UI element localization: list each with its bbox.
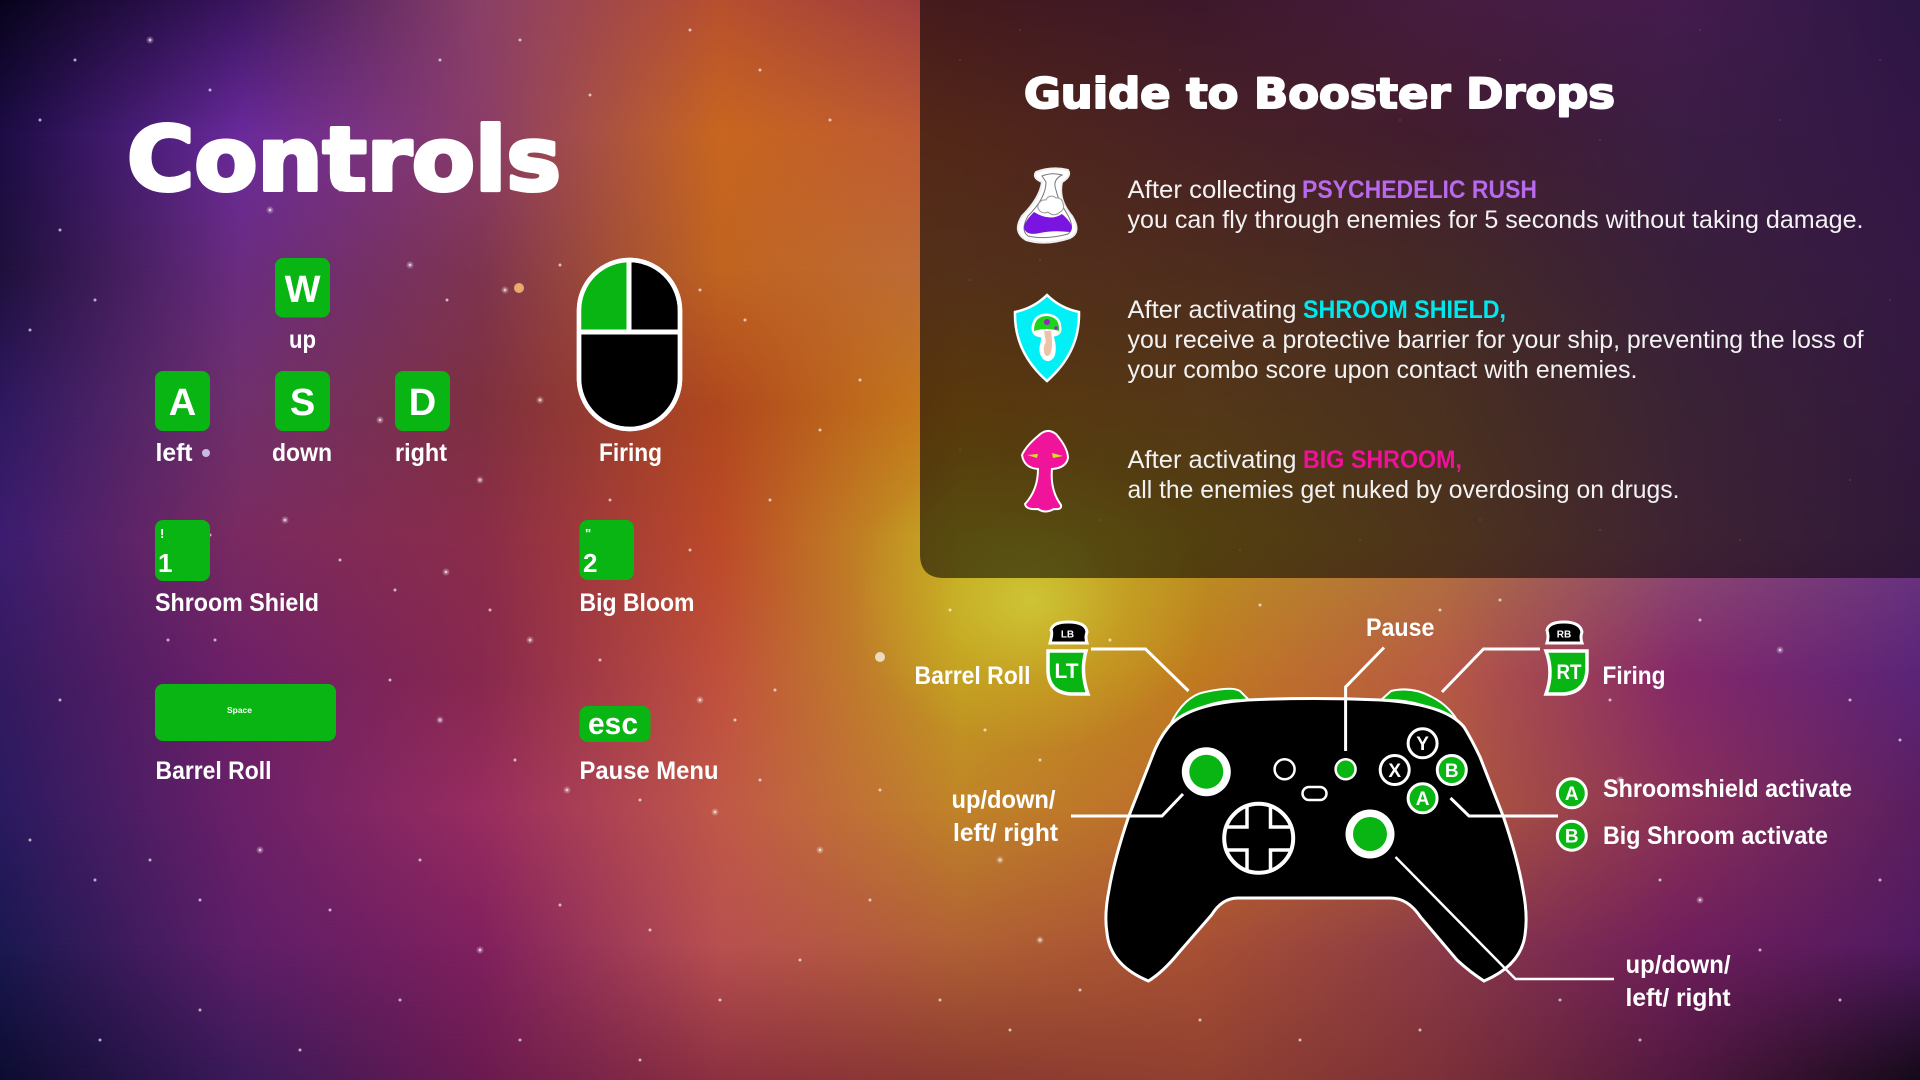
text: big shroom description: all the enemies get nuked by overdosing on drugs. xyxy=(1128,476,1680,504)
gamepad: body xyxy=(1106,698,1526,981)
key: 1 xyxy=(155,520,210,581)
label: Firing: Firing xyxy=(599,439,662,467)
text: shroom shield description line 2: your combo score upon contact with enemies. xyxy=(1128,356,1638,384)
panel: booster drops background xyxy=(920,0,1920,578)
text: shroom shield xyxy=(1128,296,1506,324)
text: psychedelic rush: After collecting xyxy=(1128,176,1296,204)
label: left stick directions: up/down/ xyxy=(952,786,1056,814)
legend: B Big Shroom activate: B xyxy=(1565,826,1579,848)
gamepad: X button: X xyxy=(1388,761,1401,782)
icon: RB: RB xyxy=(1557,630,1571,640)
label: Pause Menu: Pause Menu xyxy=(580,757,718,785)
label: right: right xyxy=(395,439,448,467)
label: Barrel Roll: Barrel Roll xyxy=(156,757,272,785)
gamepad: A button: A xyxy=(1416,789,1430,810)
label: Firing trigger: Firing xyxy=(1602,662,1666,690)
key: 2: 2 xyxy=(583,548,597,578)
key: A: A xyxy=(169,382,196,424)
icon: RB xyxy=(1547,622,1582,643)
label: right stick directions: up/down/ xyxy=(1626,951,1731,979)
icon: psychedelic rush flask xyxy=(1018,168,1077,243)
text: big shroom xyxy=(1128,446,1462,474)
gamepad: X button xyxy=(1380,756,1409,784)
key: 1: 1 xyxy=(158,548,172,578)
label: up: up xyxy=(289,326,316,354)
label: right stick directions: left/ right xyxy=(1626,984,1731,1012)
text: shroom shield: SHROOM SHIELD, xyxy=(1303,296,1506,324)
key: 2 xyxy=(580,520,634,580)
key: 1: ! xyxy=(160,526,164,541)
gamepad: left stick xyxy=(1182,747,1231,796)
key: esc: esc xyxy=(588,706,638,741)
label: Barrel Roll bumper: Barrel Roll xyxy=(914,662,1030,690)
text: big shroom: BIG SHROOM, xyxy=(1303,446,1462,474)
icon: LT: LT xyxy=(1054,660,1079,683)
gamepad: share button xyxy=(1302,787,1326,800)
legend: B Big Shroom activate: Big Shroom activate xyxy=(1603,822,1828,850)
gamepad: Y button: Y xyxy=(1416,734,1429,755)
key: Space xyxy=(155,684,336,741)
gamepad: left bumper highlight xyxy=(1170,689,1249,725)
key: D xyxy=(395,371,450,431)
diagram: gamepad xyxy=(1106,689,1526,981)
gamepad: Y button xyxy=(1408,729,1437,758)
icon: LB: LB xyxy=(1061,630,1074,640)
label: right stick directions xyxy=(1626,951,1731,1012)
label: left stick directions: left/ right xyxy=(953,819,1059,847)
icon: LB xyxy=(1050,622,1087,643)
text: big shroom: After activating xyxy=(1128,446,1296,474)
icon: mouse xyxy=(579,260,680,429)
key: D: D xyxy=(409,382,436,424)
gamepad: B button xyxy=(1437,756,1466,784)
key: W: W xyxy=(285,269,321,311)
label: Pause: Pause xyxy=(1366,614,1435,642)
legend: A Shroomshield activate xyxy=(1557,775,1852,808)
label: left stick directions xyxy=(952,786,1059,847)
gamepad: right bumper highlight xyxy=(1381,689,1460,725)
gamepad: right stick xyxy=(1346,810,1394,858)
key: Space: Space xyxy=(227,705,252,715)
key: A xyxy=(155,371,210,431)
icon: RT xyxy=(1546,651,1587,694)
gamepad: B button: B xyxy=(1445,761,1459,782)
legend: A Shroomshield activate: Shroomshield activate xyxy=(1603,775,1852,803)
key: S xyxy=(275,371,330,431)
icon: big shroom xyxy=(1022,431,1068,512)
text: psychedelic rush xyxy=(1128,176,1537,204)
gamepad: view button xyxy=(1275,759,1295,779)
key: W xyxy=(275,258,330,318)
text: psychedelic rush: PSYCHEDELIC RUSH xyxy=(1302,176,1537,204)
icon: LT xyxy=(1048,651,1088,694)
gamepad: A button xyxy=(1408,784,1437,813)
text: psychedelic rush description: you can fly through enemies for 5 seconds without taking damage. xyxy=(1128,206,1864,234)
text: shroom shield: After activating xyxy=(1128,296,1296,324)
label: left: left xyxy=(156,439,193,467)
key: 2: " xyxy=(585,526,591,541)
title: Controls: Controls xyxy=(127,108,561,211)
icon: shroom shield xyxy=(1015,295,1079,381)
gamepad: menu button xyxy=(1336,759,1356,779)
heading: Guide to Booster Drops: Guide to Booster Drops xyxy=(1024,69,1615,118)
leader lines xyxy=(1071,648,1614,979)
icon: RT: RT xyxy=(1556,661,1582,684)
key: S: S xyxy=(290,382,315,424)
label: Shroom Shield: Shroom Shield xyxy=(155,589,319,617)
label: down: down xyxy=(272,439,332,467)
gamepad: d-pad xyxy=(1224,804,1293,873)
legend: A Shroomshield activate: A xyxy=(1565,784,1579,805)
label: Big Bloom: Big Bloom xyxy=(580,589,694,617)
text: shroom shield description line 1: you receive a protective barrier for your ship, preventing the loss of xyxy=(1128,326,1864,354)
